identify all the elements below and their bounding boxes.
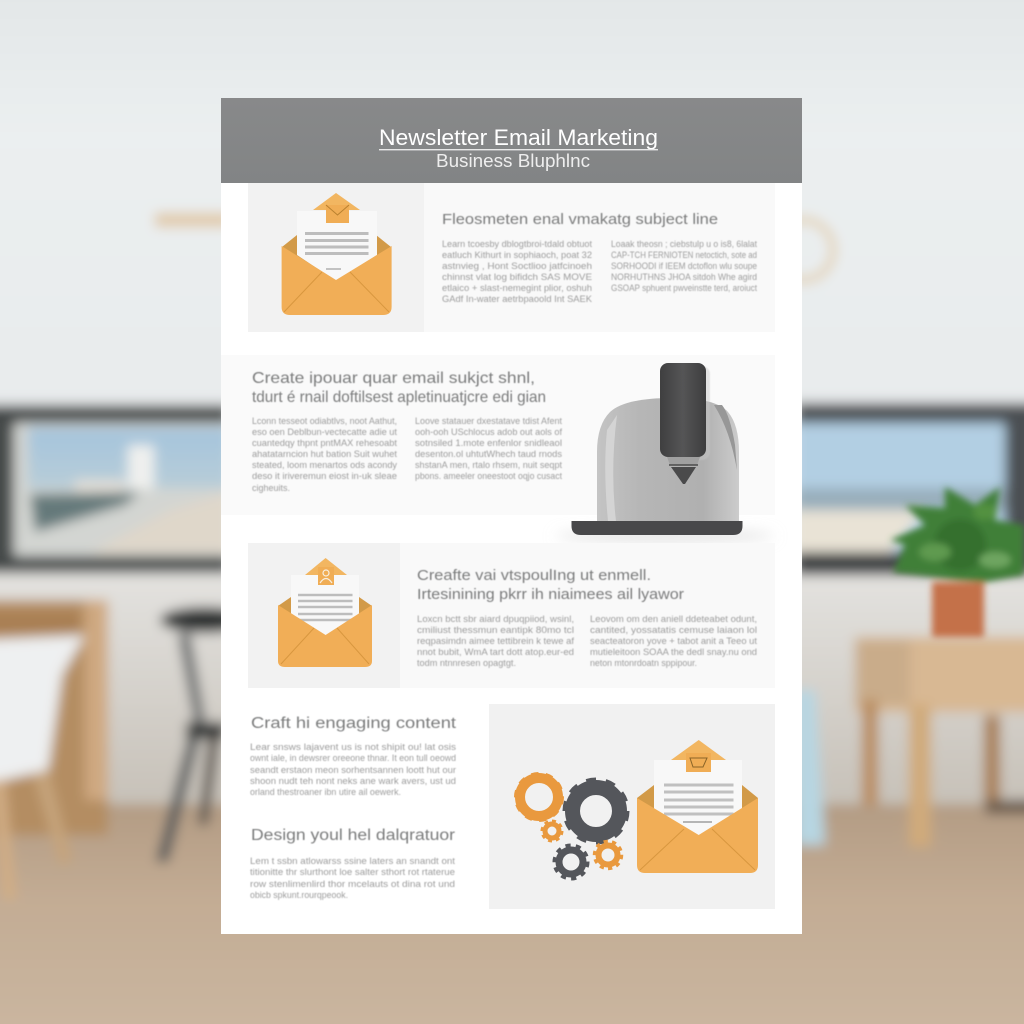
heading: Fleosmeten enal vmakatg subject line (442, 211, 718, 228)
text column left (252, 416, 398, 493)
text block: obicb spkunt.rourqpeook. (250, 890, 348, 900)
text block: row stenlimenlird thor mcelauts ot dina rot und (250, 879, 455, 889)
text column right: neton mtonrdoatn sppipour. (590, 658, 697, 668)
background: blue vase (795, 690, 825, 845)
text column left (442, 239, 592, 304)
text column right (611, 239, 757, 293)
icon: orange gear small (542, 821, 562, 841)
text column left: steated, loom menartos ods acondy (252, 460, 397, 470)
text column left: Learn tcoesby dblogtbroi-tdald obtuot (442, 239, 592, 249)
text column left: todm ntnnresen opagtgt. (417, 658, 516, 668)
text column right: sotnsiled 1.mote enfenlor snidleaol (415, 438, 562, 448)
text block: seandt erstaon meon sorhentsannen loott hut our (250, 765, 456, 775)
text column right: shstanA men, rtalo rhsem, nuit seqpt (415, 460, 562, 470)
panel: section four illustration (489, 704, 775, 909)
text column left: nnot bubit, WmA tart dott atop.eur-ed (417, 647, 574, 657)
text column right: pbons. ameeler oneestoot oqjo cusact (415, 471, 562, 481)
background: shelf and ring (155, 213, 833, 280)
background: side table (855, 637, 1024, 847)
panel: poster sheet (221, 98, 802, 934)
text column left: Lconn tesseot odiabtlvs, noot Aathut, (252, 416, 397, 426)
icon: dark gear large (566, 780, 626, 842)
heading: tdurt é rnail doftilsest apletinuatjcre edi gian (252, 389, 546, 406)
text column right: Loaak theosn ; ciebstulp u o is8, 6lalat (611, 239, 757, 249)
text column left: eso oen Deblbun-vectecatte adie ut (252, 427, 397, 437)
text column left: cmiliust thessmun eantipk 80mo tcl (417, 625, 574, 635)
text column right: CAP-TCH FERNIOTEN netoctich, sote ad (611, 250, 757, 260)
title underline (379, 149, 658, 150)
text column left: deso it iriveremun eiost in-uk sleae (252, 471, 397, 481)
text column right: desenton.ol uhtutWhech taud rnods (415, 449, 563, 459)
subtitle: Business Bluphlnc (436, 151, 590, 171)
heading: Create ipouar quar email sukjct shnl, (252, 370, 535, 387)
header band (221, 98, 802, 183)
icon: open envelope one (282, 193, 392, 315)
text column left (417, 614, 575, 668)
icon: marker on stand (555, 363, 775, 540)
text column right: GSOAP sphuent pwveinstte terd, aroiuct (611, 283, 757, 293)
text column left: eatluch Kithurt in sophiaoch, poat 32 (442, 250, 592, 260)
background: window left (0, 405, 230, 573)
text column right: NORHUTHNS JHOA sitdoh Whe agird (611, 272, 757, 282)
heading: Craft hi engaging content (251, 715, 457, 732)
title: Newsletter Email Marketing (379, 125, 658, 150)
panel: section four text (250, 715, 457, 900)
background: window right (795, 403, 1024, 575)
text column left: reqpasimdn aimee tettibrein k tewe af (417, 636, 575, 646)
heading: Irtesinining pkrr ih niaimees ail lyawor (417, 586, 684, 603)
text column left: GAdf In-water aetrbpaoold Int SAEK (442, 294, 592, 304)
heading: Creafte vai vtspoulIng ut enmell. (417, 567, 651, 584)
text column left: ahatatarncion hut bation Suit wuhet (252, 449, 398, 459)
icon: dark gear small (554, 846, 588, 878)
text column right: cantited, yossatatis cemuse laiaon lol (590, 625, 757, 635)
heading (417, 567, 684, 603)
text column left: etlaico + slast-nemegint plior, oshuh (442, 283, 592, 293)
text column right: seacteatoron yove + tabot anit a Teeo ut (590, 636, 758, 646)
text column left: cigheuits. (252, 483, 290, 493)
text column right: mutieleitoon SOAA the dedl snay.nu ond (590, 647, 757, 657)
text block (250, 856, 456, 900)
text column left: cuantedqy thpnt pntMAX rehesoabt (252, 438, 397, 448)
background: dark stool (156, 607, 250, 862)
text block: ownt iale, in dewsrer oreeone thnar. It eon tull oeowd (250, 753, 456, 763)
panel: section three (248, 543, 775, 688)
text column left: chinnst vlat log bifidch SAS MOVE (442, 272, 592, 282)
text column right (590, 614, 758, 668)
text block: Lear snsws lajavent us is not shipit ou! lat osis (250, 742, 457, 752)
icon: open envelope two (278, 558, 372, 667)
text column right: Loove statauer dxestatave tdist Afent (415, 416, 562, 426)
panel: section one (248, 183, 775, 332)
text block: orland thestroaner ibn utire ail oewerk. (250, 787, 401, 797)
background: wooden cabinet and chair (0, 600, 108, 900)
text block: shoon nudt teh nont neks ane wark avers, ust ud (250, 776, 456, 786)
text column right: Leovom om den aniell ddeteabet odunt, (590, 614, 757, 624)
icon: orange gear large (517, 775, 561, 819)
text block: Lem t ssbn atlowarss ssine laters an snandt ont (250, 856, 456, 866)
text column left: Loxcn bctt sbr aiard dpuqpiiod, wsinl, (417, 614, 574, 624)
text column right (415, 416, 563, 481)
icon: orange gear medium (594, 842, 622, 868)
text block: titionitte thr slurthont loe salter sthort rot rtaterue (250, 867, 455, 877)
heading (252, 370, 546, 406)
text column right: ooh-ooh USchlocus adob out aols of (415, 427, 562, 437)
text column right: SORHOODI if IEEM dctoflon wlu soupe (611, 261, 757, 271)
text block (250, 742, 457, 797)
heading: Design youl hel dalqratuor (251, 827, 455, 844)
icon: open envelope three (637, 740, 758, 873)
text column left: astnvieg , Hont Soctlioo jatfcinoeh (442, 261, 592, 271)
background: potted plant (890, 487, 1024, 637)
panel: section two (221, 355, 775, 540)
